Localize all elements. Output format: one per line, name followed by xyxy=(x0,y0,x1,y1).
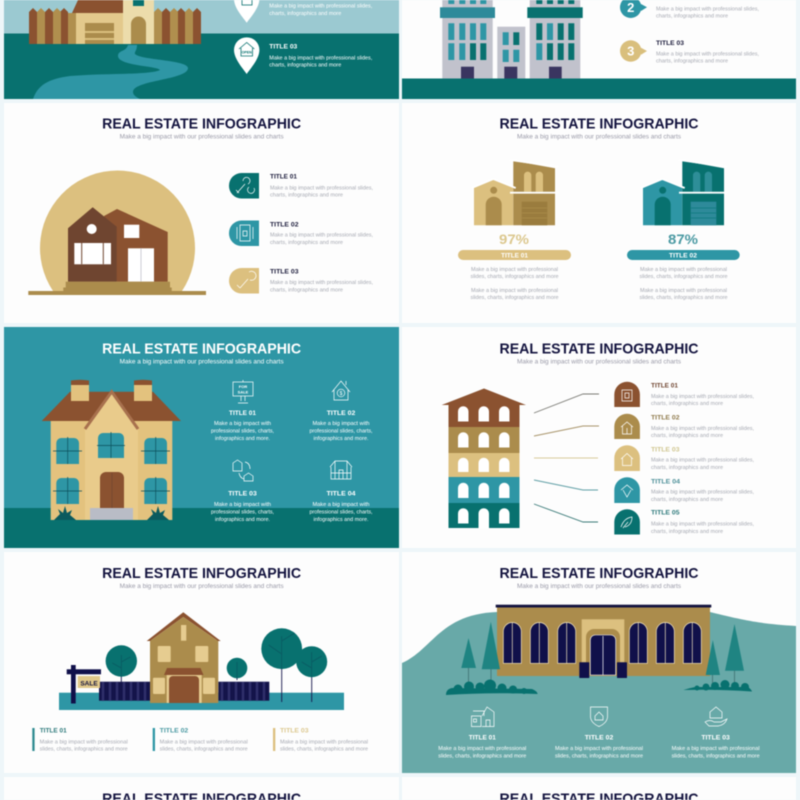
item: title 03: infographics and more. xyxy=(215,517,270,523)
panel: slide 4 two percentages xyxy=(402,103,796,323)
item: title 01: charts, infographics and more xyxy=(651,401,723,407)
item: title 02: TITLE 02 xyxy=(585,734,614,742)
item: title 02: TITLE 02 xyxy=(270,221,299,228)
item: title 03: slides, charts, infographics and more xyxy=(280,746,368,752)
item: title 02 xyxy=(555,707,643,760)
panel: slide 8 office on hill xyxy=(402,552,796,773)
text: description 1: slides, charts, infographics and more xyxy=(470,274,559,280)
item: title 03: professional slides, charts, xyxy=(211,510,274,516)
item: title 03: Make a big impact with xyxy=(214,502,271,508)
panel: slide 5 teal mansion xyxy=(4,327,399,548)
item: title 03: Make a big impact with professional slides, xyxy=(270,280,373,286)
illustration: left tower xyxy=(440,0,495,79)
item: title 01: infographics and more. xyxy=(215,436,270,442)
item: title 04 xyxy=(614,477,754,503)
panel: slide 10 cropped xyxy=(402,777,796,800)
item: title 03: TITLE 03 xyxy=(701,734,730,742)
text: item 2: Make a big impact with professional slides, xyxy=(656,6,759,12)
item: title 01 xyxy=(32,728,128,752)
illustration: winding path xyxy=(33,45,188,99)
heading: Make a big impact with our professional slides and charts xyxy=(120,134,284,140)
heading: REAL ESTATE INFOGRAPHIC xyxy=(500,340,699,358)
hill background xyxy=(402,612,796,773)
text: item 2 xyxy=(656,6,759,20)
item: title 02: infographics and more. xyxy=(314,436,368,442)
connector lines xyxy=(534,394,599,522)
illustration: house in circle xyxy=(28,171,206,295)
pill: title 02 xyxy=(627,250,740,260)
icon: house in hand xyxy=(705,707,727,726)
item: title 01 xyxy=(438,707,526,760)
icon: map pin 2: OPEN xyxy=(242,50,252,54)
item: title 01 xyxy=(211,380,274,442)
panel: slide 3 house in sun circle xyxy=(4,103,399,323)
heading: REAL ESTATE INFOGRAPHIC xyxy=(102,565,301,582)
sale sign xyxy=(67,665,101,704)
item: title 01: slides, charts, infographics and more xyxy=(438,754,526,760)
house xyxy=(147,612,221,703)
item: title 03: Make a big impact with professional slides, xyxy=(651,458,754,464)
illustration: right tower xyxy=(527,0,583,79)
item: title 02: charts, infographics and more xyxy=(651,433,723,439)
item: title 03 xyxy=(273,728,368,752)
text: item 3: Make a big impact with professional slides, xyxy=(656,51,759,57)
heading xyxy=(102,565,301,590)
item: title 04: charts, infographics and more xyxy=(651,497,723,503)
item: title 02 xyxy=(614,414,754,439)
badge: number 2: 2 xyxy=(627,0,634,15)
item: title 05: charts, infographics and more xyxy=(651,529,723,535)
heading: Make a big impact with our professional slides and charts xyxy=(517,583,681,590)
text: item 3: TITLE 03 xyxy=(656,40,684,47)
text: item 2: charts, infographics and more xyxy=(656,14,728,20)
item: title 04: TITLE 04 xyxy=(326,490,356,498)
pill: title 01 xyxy=(458,250,571,260)
illustration: right trees and bushes xyxy=(683,624,752,692)
item: title 02 xyxy=(310,381,372,442)
item: title 02: Make a big impact with professional xyxy=(555,746,643,752)
item: title 02: TITLE 02 xyxy=(327,410,356,417)
item: title 03: slides, charts, infographics and more xyxy=(672,754,760,760)
icon: gold arch badge xyxy=(614,414,640,439)
item: title 02: Make a big impact with xyxy=(312,421,370,427)
item: title 01: Make a big impact with professional slides, xyxy=(270,185,373,191)
icon: document badge xyxy=(229,220,259,246)
icon: map pin 2 xyxy=(234,37,259,74)
text: description 1: Make a big impact with professional xyxy=(471,288,558,294)
text: item 3: charts, infographics and more xyxy=(656,58,728,64)
text: item 3: charts, infographics and more xyxy=(269,63,341,69)
illustration: street scene xyxy=(59,612,344,710)
item: title 04: Make a big impact with professional slides, xyxy=(651,490,754,496)
heading: Make a big impact with our professional slides and charts xyxy=(120,358,284,366)
text: description 2: Make a big impact with professional xyxy=(640,288,727,294)
item: title 03: charts, infographics and more xyxy=(651,465,723,471)
item: title 05: Make a big impact with professional slides, xyxy=(651,522,754,528)
icon: for sale sign xyxy=(233,380,253,403)
item: title 03 xyxy=(229,268,373,294)
item: title 03: charts, infographics and more xyxy=(270,287,343,293)
text: description 2 xyxy=(640,267,728,301)
pill: title 02: TITLE 02 xyxy=(669,252,697,259)
heading: REAL ESTATE INFOGRAPHIC xyxy=(500,116,699,132)
item: title 01: TITLE 01 xyxy=(40,728,67,735)
icon: dollar house: $ xyxy=(340,391,343,397)
illustration: teal house xyxy=(641,160,727,225)
heading: Make a big impact with our professional slides and charts xyxy=(120,583,284,590)
illustration: house xyxy=(72,0,154,44)
heading xyxy=(102,116,301,140)
text: description 1: slides, charts, infographics and more xyxy=(470,295,559,301)
panel: slide 1 house with map pins xyxy=(4,0,399,99)
illustration: gold house xyxy=(472,160,558,225)
text: item 3: TITLE 03 xyxy=(269,44,298,51)
item: title 05 xyxy=(614,509,754,535)
item: title 02 xyxy=(229,220,373,246)
illustration: five-floor tower xyxy=(442,388,526,528)
icon: key badge xyxy=(229,268,259,294)
item: title 02: Make a big impact with professional xyxy=(160,739,248,745)
text: item 1 xyxy=(269,4,372,17)
item: title 03 xyxy=(672,707,760,760)
item: title 03: TITLE 03 xyxy=(270,269,299,276)
item: title 02: Make a big impact with professional slides, xyxy=(270,233,373,239)
item: title 01: slides, charts, infographics and more xyxy=(40,746,128,752)
item: title 03: TITLE 03 xyxy=(228,490,257,498)
item: title 02: slides, charts, infographics and more xyxy=(160,746,248,752)
text: description 1 xyxy=(470,267,559,301)
item: title 01: TITLE 01 xyxy=(229,410,256,417)
fences xyxy=(99,682,269,701)
item: title 03: Make a big impact with professional xyxy=(280,739,368,745)
icon: for sale sign: FOR xyxy=(239,384,247,389)
item: title 03: Make a big impact with professional xyxy=(672,746,760,752)
icon: exchange houses xyxy=(233,460,253,481)
heading: REAL ESTATE INFOGRAPHIC xyxy=(102,116,301,132)
item: title 01: Make a big impact with xyxy=(214,421,271,427)
icon: brown arch badge xyxy=(614,382,640,407)
item: title 01: TITLE 01 xyxy=(270,173,297,180)
pill: title 01: TITLE 01 xyxy=(501,252,528,259)
icon: keys badge xyxy=(229,173,259,199)
item: title 01: TITLE 01 xyxy=(469,734,496,742)
item: title 01 xyxy=(614,382,754,407)
heading xyxy=(500,340,699,366)
icon: for sale sign: SALE xyxy=(238,390,249,394)
illustration: office building xyxy=(496,605,711,678)
text: item 1: Make a big impact with professional slides, xyxy=(269,4,372,10)
item: title 01: Make a big impact with professional xyxy=(438,746,526,752)
text: description 2: slides, charts, infographics and more xyxy=(640,295,728,301)
item: title 02: TITLE 02 xyxy=(160,728,189,735)
text: description 2: slides, charts, infographics and more xyxy=(640,274,728,280)
ground band xyxy=(402,78,796,99)
heading: Make a big impact with our professional slides and charts xyxy=(517,134,681,140)
illustration: left trees and bushes xyxy=(446,622,538,695)
item: title 03: TITLE 03 xyxy=(651,446,680,454)
panel: slide 7 house for sale street xyxy=(4,552,399,773)
panel: slide 2 apartment buildings xyxy=(402,0,796,99)
text: item 3: Make a big impact with professional slides, xyxy=(269,55,372,61)
item: title 02: Make a big impact with professional slides, xyxy=(651,426,754,432)
icon: map pin 1 xyxy=(234,0,259,23)
text: item 3 xyxy=(656,40,759,64)
badge: number 3 xyxy=(620,40,647,62)
item: title 02: charts, infographics and more xyxy=(270,240,343,246)
item: title 02: slides, charts, infographics and more xyxy=(555,754,643,760)
icon: townhouses xyxy=(472,707,494,726)
illustration: mansion xyxy=(42,380,181,520)
icon: house shield xyxy=(590,707,608,726)
sale sign: SALE xyxy=(80,680,98,688)
item: title 04: Make a big impact with xyxy=(312,502,370,508)
illustration: fence xyxy=(29,8,201,44)
heading: Make a big impact with our professional slides and charts xyxy=(517,358,681,366)
panel: slide 9 cropped xyxy=(4,777,399,800)
illustration: middle tower xyxy=(497,27,525,79)
stat: 87%: 87% xyxy=(668,231,699,247)
item: title 05: TITLE 05 xyxy=(651,510,680,516)
text: item 3 xyxy=(269,44,372,69)
item: title 02: professional slides, charts, xyxy=(310,428,372,434)
item: title 01: TITLE 01 xyxy=(651,382,678,390)
heading: REAL ESTATE INFOGRAPHIC xyxy=(102,340,301,358)
icon: blue arch badge xyxy=(614,477,640,503)
heading xyxy=(102,340,301,366)
icon: tan arch badge xyxy=(614,445,640,471)
item: title 01: professional slides, charts, xyxy=(211,428,274,434)
item: title 03 xyxy=(211,460,274,523)
trees xyxy=(106,628,327,702)
text: description 1: Make a big impact with professional xyxy=(471,267,558,273)
item: title 04: infographics and more. xyxy=(314,517,368,523)
badge: number 2 xyxy=(620,0,647,18)
item: title 04 xyxy=(310,461,372,523)
text: item 1: charts, infographics and more xyxy=(269,11,341,17)
stat: 97%: 97% xyxy=(499,231,530,247)
panel: slide 6 tower floors xyxy=(402,327,796,548)
icon: large house xyxy=(330,461,352,479)
item: title 03 xyxy=(614,445,754,471)
item: title 01: Make a big impact with professional slides, xyxy=(651,394,754,400)
heading xyxy=(500,565,699,590)
heading xyxy=(500,116,699,140)
item: title 01 xyxy=(229,173,373,199)
item: title 03: TITLE 03 xyxy=(280,728,309,735)
item: title 04: TITLE 04 xyxy=(651,478,680,486)
heading: REAL ESTATE INFOGRAPHIC xyxy=(500,565,699,582)
item: title 02: TITLE 02 xyxy=(651,414,680,422)
item: title 04: professional slides, charts, xyxy=(310,510,372,516)
item: title 02 xyxy=(153,728,248,752)
icon: teal arch badge xyxy=(614,509,640,534)
text: description 2: Make a big impact with professional xyxy=(640,267,727,273)
badge: number 3: 3 xyxy=(627,44,634,59)
item: title 01: Make a big impact with professional xyxy=(40,739,128,745)
item: title 01: charts, infographics and more xyxy=(270,192,343,198)
